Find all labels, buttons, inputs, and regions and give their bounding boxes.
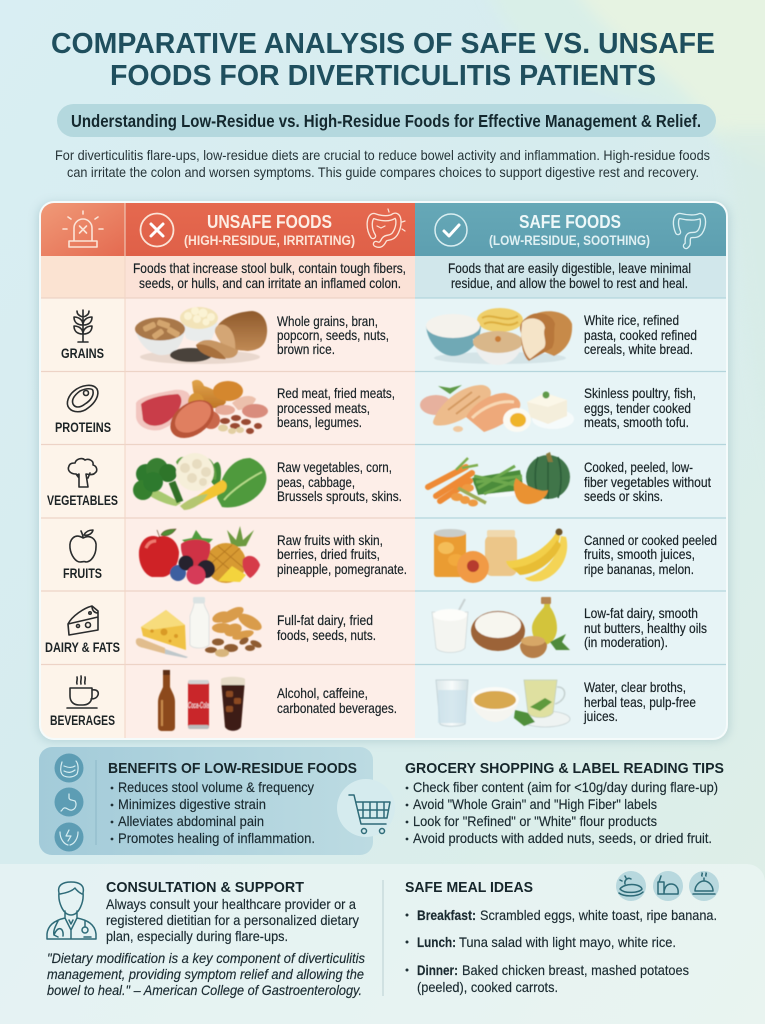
intro text [55, 148, 710, 180]
text: safe fruits: Canned or cooked peeled [584, 533, 717, 548]
text: consultation: registered dietitian for a personalized dietary [106, 912, 359, 928]
list: safe meal ideas: Breakfast: [417, 907, 476, 923]
list: grocery tips: Avoid "Whole Grain" and "High Fiber" labels [413, 796, 657, 812]
text: unsafe vegetables: Raw vegetables, corn, [277, 460, 392, 475]
text: safe beverages: herbal teas, pulp-free [584, 695, 696, 710]
text: safe fruits [584, 533, 717, 577]
label: vegetables: VEGETABLES [47, 493, 118, 508]
text: unsafe proteins: Red meat, fried meats, [277, 386, 395, 401]
row: dairy and fats [45, 597, 707, 658]
text: safe vegetables: seeds or skins. [584, 489, 663, 504]
column description: safe: Foods that are easily digestible, leave minimal [448, 260, 691, 276]
icon: broccoli [68, 459, 97, 487]
icon: wheat [74, 310, 92, 342]
text: safe proteins: Skinless poultry, fish, [584, 386, 696, 401]
list: safe meal ideas: Baked chicken breast, mashed potatoes [462, 962, 689, 978]
heading: consultation: CONSULTATION & SUPPORT [106, 879, 304, 896]
text: unsafe grains: Whole grains, bran, [277, 314, 378, 329]
image: safe vegetables [428, 452, 570, 506]
label: proteins: PROTEINS [55, 420, 111, 435]
subtitle banner [57, 104, 716, 137]
list: safe meal ideas: Dinner: [417, 962, 458, 978]
text: safe vegetables [584, 460, 711, 504]
list: safe meal ideas: Lunch: [417, 934, 456, 950]
text: safe fruits: fruits, smooth juices, [584, 547, 695, 562]
row: fruits [63, 526, 717, 584]
title: COMPARATIVE ANALYSIS OF SAFE VS. UNSAFE [51, 28, 715, 60]
text: unsafe fruits [277, 533, 407, 577]
icon: inflamed colon [370, 209, 405, 245]
heading: safe foods [435, 212, 703, 248]
text: safe proteins [584, 386, 696, 430]
label: grains: GRAINS [61, 346, 104, 361]
column description: unsafe [133, 260, 406, 291]
text: unsafe dairy: Full-fat dairy, fried [277, 613, 373, 628]
text: safe grains: cereals, white bread. [584, 342, 693, 357]
panel: grocery shopping tips [405, 760, 724, 846]
text: safe dairy: Low-fat dairy, smooth [584, 606, 698, 621]
label: fruits: FRUITS [63, 566, 102, 581]
image: safe beverages [436, 680, 570, 727]
quote: bowel to heal." – American College of Gastroenterology. [47, 982, 362, 998]
heading: safe foods: SAFE FOODS [519, 212, 621, 232]
text: consultation [106, 896, 359, 944]
column description: safe: residue, and allow the bowel to rest and heal. [451, 275, 688, 291]
text: unsafe grains [277, 314, 389, 357]
text: unsafe dairy [277, 613, 376, 643]
text: safe vegetables: fiber vegetables without [584, 475, 711, 490]
quote [47, 950, 365, 998]
text: unsafe dairy: foods, seeds, nuts. [277, 628, 376, 643]
heading: safe foods: (LOW-RESIDUE, SOOTHING) [489, 233, 650, 248]
text: safe proteins: meats, smooth tofu. [584, 415, 689, 430]
icon: stomach badge [54, 788, 84, 816]
quote: "Dietary modification is a key component of diverticulitis [47, 950, 365, 966]
quote: management, providing symptom relief and allowing the [47, 966, 364, 982]
text: safe grains: White rice, refined [584, 313, 679, 328]
icon: steaming cup [67, 676, 98, 708]
row: vegetables [47, 452, 711, 510]
title [51, 28, 715, 92]
icon: breakfast badge [616, 871, 646, 901]
text: safe beverages [583, 680, 696, 724]
image: safe dairy [432, 597, 570, 658]
image: unsafe fruits [139, 526, 260, 584]
list: benefits: Minimizes digestive strain [118, 796, 266, 812]
text: safe dairy: nut butters, healthy oils [584, 621, 707, 636]
text: unsafe beverages: carbonated beverages. [277, 701, 397, 716]
row: proteins [55, 380, 696, 446]
icon: doctor [47, 882, 96, 939]
text: safe grains [584, 313, 697, 357]
list: grocery tips [406, 779, 718, 846]
heading: unsafe foods: UNSAFE FOODS [207, 212, 332, 232]
icon: alarm siren [63, 211, 103, 247]
intro text: can irritate the colon and worsen symptoms. This guide compares choices to support digestive rest and recovery. [67, 165, 699, 180]
text: unsafe grains: brown rice. [277, 342, 335, 357]
list: safe meal ideas [406, 907, 717, 995]
text: unsafe vegetables [277, 460, 402, 504]
image: safe grains [426, 308, 572, 365]
list: benefits: Promotes healing of inflammation. [118, 830, 315, 846]
text: unsafe beverages [277, 686, 397, 716]
text: consultation: plan, especially during flare-ups. [106, 928, 288, 944]
text: consultation: Always consult your healthcare provider or a [106, 896, 356, 912]
text: unsafe fruits: berries, dried fruits, [277, 547, 380, 562]
text: safe dairy: (in moderation). [584, 635, 668, 650]
text: safe fruits: ripe bananas, melon. [584, 562, 694, 577]
icon: dinner badge [689, 871, 719, 901]
list: safe meal ideas: (peeled), cooked carrots. [417, 979, 558, 995]
text: safe dairy [584, 606, 707, 650]
icon: apple [70, 530, 96, 562]
text: safe grains: pasta, cooked refined [584, 328, 697, 343]
text: safe beverages: juices. [583, 709, 618, 724]
intro text: For diverticulitis flare-ups, low-residue diets are crucial to reduce bowel activity and inflammation. High-residue foods [55, 148, 710, 163]
image: safe fruits [434, 528, 567, 583]
list: grocery tips: Avoid products with added nuts, seeds, or dried fruit. [413, 830, 712, 846]
list: grocery tips: Look for "Refined" or "White" flour products [413, 813, 657, 829]
heading: unsafe foods [140, 209, 405, 248]
heading: grocery tips: GROCERY SHOPPING & LABEL READING TIPS [405, 760, 724, 777]
text: unsafe vegetables: peas, cabbage, [277, 475, 355, 490]
panel: bottom section [0, 864, 765, 1024]
comparison table [38, 201, 729, 741]
icon: lunch badge [653, 871, 683, 901]
title: FOODS FOR DIVERTICULITIS PATIENTS [110, 60, 656, 92]
icon: cheese [68, 606, 98, 635]
image: unsafe dairy [136, 597, 264, 658]
list: benefits: Reduces stool volume & frequency [118, 779, 314, 795]
list: grocery tips: Check fiber content (aim for <10g/day during flare-up) [413, 779, 718, 795]
panel: benefits of low-residue foods [39, 747, 395, 855]
icon: healing hands badge [54, 822, 84, 852]
column description: unsafe: Foods that increase stool bulk, contain tough fibers, [133, 260, 406, 276]
column description: safe [448, 260, 691, 291]
icon: steak [67, 385, 98, 412]
list: safe meal ideas: Tuna salad with light mayo, white rice. [459, 934, 676, 950]
icon: shopping cart [337, 779, 395, 837]
icon: intestine badge [54, 754, 84, 782]
list: safe meal ideas: Scrambled eggs, white toast, ripe banana. [480, 907, 717, 923]
text: unsafe vegetables: Brussels sprouts, skins. [277, 489, 402, 504]
icon: calm colon [676, 216, 703, 246]
image: unsafe proteins [136, 380, 268, 446]
row: grains [61, 307, 697, 365]
row: beverages [50, 670, 696, 731]
text: safe vegetables: Cooked, peeled, low- [584, 460, 693, 475]
list: benefits: Alleviates abdominal pain [118, 813, 264, 829]
text: unsafe proteins: beans, legumes. [277, 415, 362, 430]
text: unsafe fruits: Raw fruits with skin, [277, 533, 383, 548]
text: unsafe beverages: Alcohol, caffeine, [277, 686, 368, 701]
text: unsafe proteins [277, 386, 395, 430]
image: safe proteins [420, 385, 574, 432]
text: safe proteins: eggs, tender cooked [584, 401, 691, 416]
heading: unsafe foods: (HIGH-RESIDUE, IRRITATING) [184, 233, 355, 248]
text: safe beverages: Water, clear broths, [584, 680, 686, 695]
heading: safe meal ideas: SAFE MEAL IDEAS [405, 879, 533, 896]
list: benefits [111, 779, 315, 846]
heading: benefits: BENEFITS OF LOW-RESIDUE FOODS [108, 760, 357, 777]
text: unsafe fruits: pineapple, pomegranate. [277, 562, 407, 577]
text: unsafe grains: popcorn, seeds, nuts, [277, 328, 389, 343]
image: unsafe beverages [158, 670, 245, 731]
column description: unsafe: seeds, or hulls, and can irritate an inflamed colon. [139, 275, 401, 291]
label: beverages: BEVERAGES [50, 713, 115, 728]
text: unsafe proteins: processed meats, [277, 401, 370, 416]
label: dairy and fats: DAIRY & FATS [45, 640, 120, 655]
image: unsafe vegetables [133, 453, 266, 510]
image: unsafe grains [135, 307, 267, 364]
image: unsafe beverages: Coca-Cola [188, 701, 209, 710]
